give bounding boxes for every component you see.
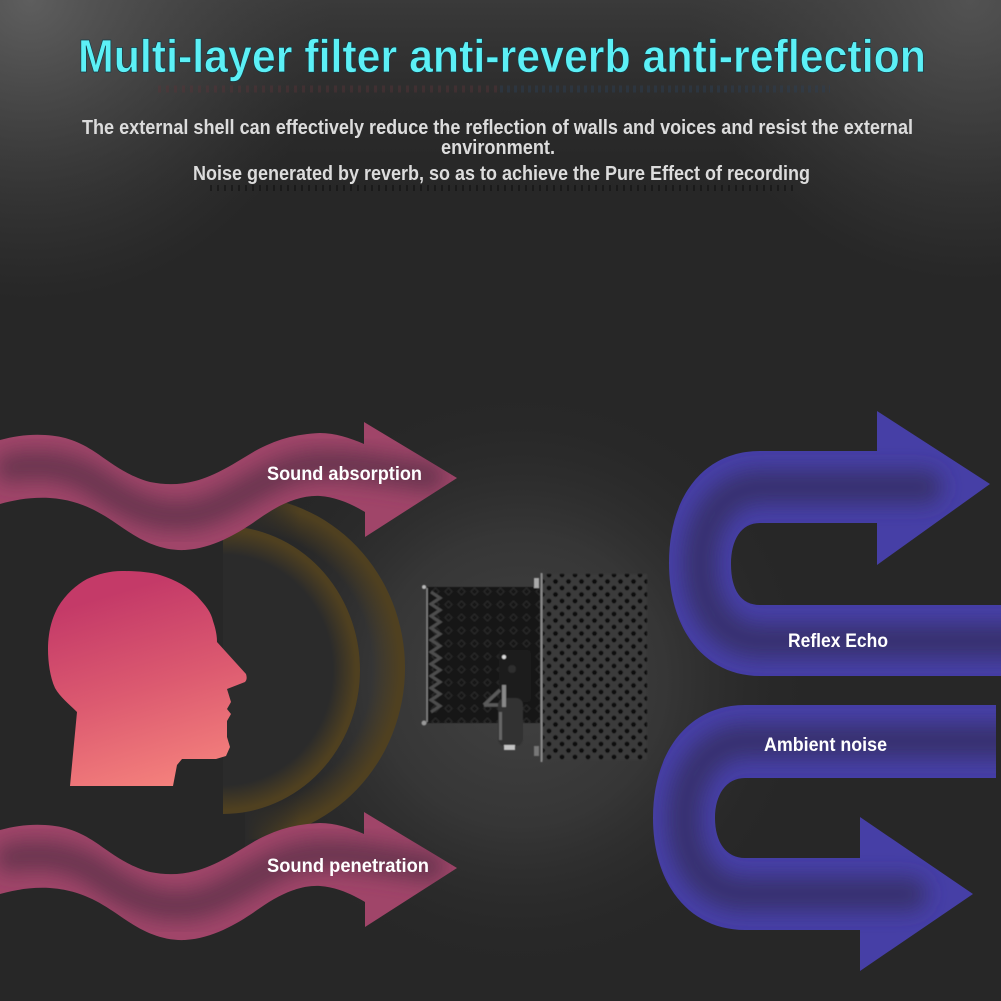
arrow: sound absorption: [0, 420, 460, 555]
label: ambient noise: Ambient noise: [764, 735, 887, 756]
description text: [82, 117, 913, 185]
faint artifact row under the title: [158, 86, 830, 92]
microphone isolation shield: [422, 573, 647, 762]
sound wave arcs: [223, 503, 405, 839]
title: Multi-layer filter anti-reverb anti-reflection: [78, 30, 926, 82]
label: reflex echo: Reflex Echo: [788, 631, 888, 652]
description text: environment.: [441, 137, 555, 159]
arrow: reflex echo: [660, 405, 1001, 685]
arrow: sound penetration: [0, 810, 460, 945]
description text: The external shell can effectively reduce the reflection of walls and voices and resist the external: [82, 117, 913, 139]
faint artifact row under the description: [210, 185, 795, 191]
icon: human head silhouette: [48, 571, 247, 786]
left foam panel: [422, 585, 541, 726]
labels: [267, 464, 888, 877]
right perforated panel: [534, 573, 647, 762]
label: sound penetration: Sound penetration: [267, 856, 429, 877]
arrow: ambient noise: [645, 700, 1001, 975]
label: sound absorption: Sound absorption: [267, 464, 422, 485]
microphone: [484, 650, 531, 750]
description text: Noise generated by reverb, so as to achieve the Pure Effect of recording: [193, 163, 810, 185]
